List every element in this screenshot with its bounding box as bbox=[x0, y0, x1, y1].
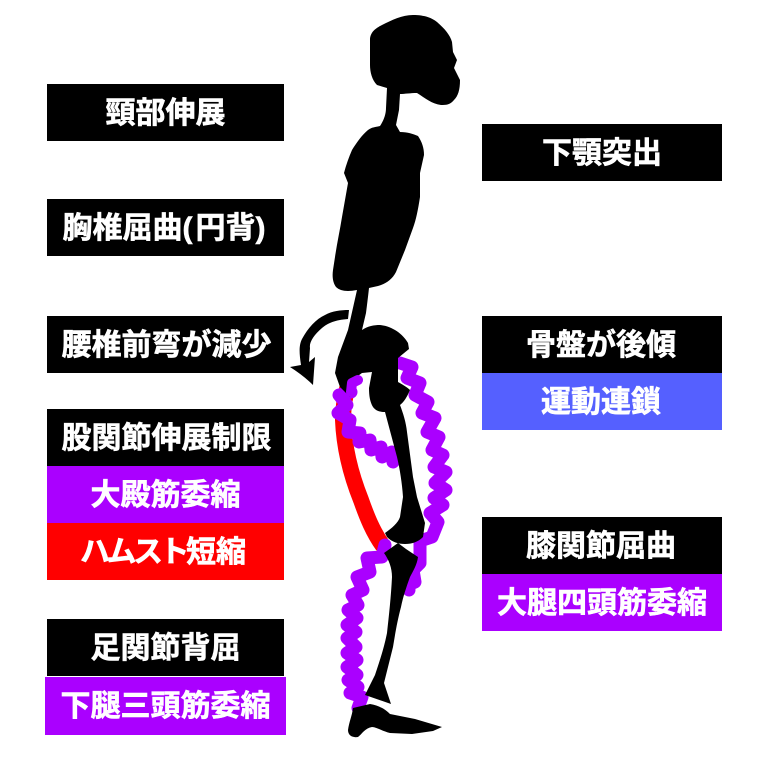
label: thoracic flexion bbox=[47, 199, 284, 256]
muscle: gluteus (purple) bbox=[338, 392, 393, 462]
label: hip extension limit: 股関節伸展制限 bbox=[62, 422, 272, 455]
label: kinetic chain bbox=[482, 373, 722, 430]
muscle: hamstrings (red) bbox=[343, 375, 383, 546]
arrow: pelvis rotation bbox=[290, 310, 349, 385]
label: mandible protrusion bbox=[482, 124, 722, 181]
label: hamstring shortening bbox=[47, 523, 284, 580]
muscle: gluteus origin hook (purple) bbox=[351, 380, 358, 392]
label: gluteus atrophy: 大殿筋委縮 bbox=[90, 479, 240, 512]
label: kinetic chain: 運動連鎖 bbox=[541, 386, 661, 419]
label: knee flexion bbox=[482, 517, 722, 574]
label: thoracic flexion: 胸椎屈曲(円背) bbox=[62, 212, 268, 245]
silhouette: lower leg bbox=[365, 543, 418, 704]
muscle: triceps surae (purple) bbox=[347, 545, 385, 708]
label: ankle dorsiflexion bbox=[47, 619, 284, 676]
label: mandible protrusion: 下顎突出 bbox=[542, 137, 662, 170]
label: triceps surae atrophy: 下腿三頭筋委縮 bbox=[60, 690, 270, 723]
label: neck extension bbox=[47, 84, 284, 141]
label: reduced lumbar lordosis: 腰椎前弯が減少 bbox=[62, 329, 272, 362]
label: quadriceps atrophy bbox=[482, 574, 722, 631]
label: neck extension: 頸部伸展 bbox=[106, 97, 226, 130]
label: hamstring shortening: ハムスト短縮 bbox=[80, 536, 246, 569]
label: gluteus atrophy bbox=[47, 466, 284, 523]
label: reduced lumbar lordosis bbox=[47, 316, 284, 373]
label: hip extension limit bbox=[47, 409, 284, 466]
silhouette: foot bbox=[348, 704, 442, 737]
muscle: quadriceps (purple) bbox=[400, 363, 446, 590]
silhouette: head, neck and torso bbox=[333, 15, 460, 544]
label: pelvic tilt: 骨盤が後傾 bbox=[526, 329, 676, 362]
label: triceps surae atrophy bbox=[45, 677, 286, 735]
label: pelvic tilt bbox=[482, 316, 722, 373]
label: knee flexion: 膝関節屈曲 bbox=[526, 530, 676, 563]
label: ankle dorsiflexion: 足関節背屈 bbox=[90, 632, 240, 665]
label: quadriceps atrophy: 大腿四頭筋委縮 bbox=[497, 587, 707, 620]
